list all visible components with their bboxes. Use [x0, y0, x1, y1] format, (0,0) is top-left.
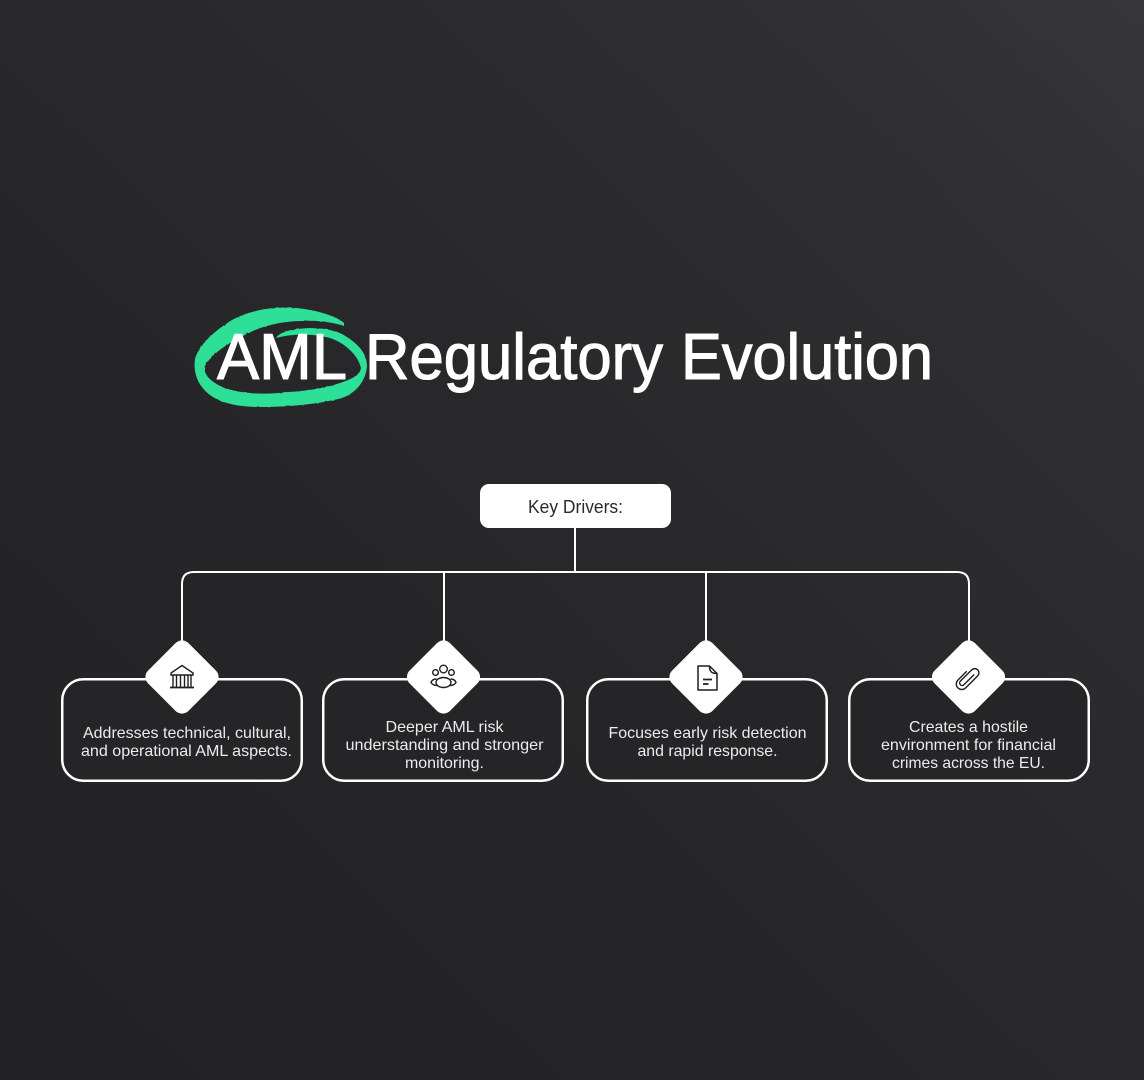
card 1 text: and operational AML aspects.	[81, 743, 292, 760]
card 3 text: and rapid response.	[638, 743, 778, 760]
card 4 text: environment for financial	[881, 737, 1056, 754]
key drivers box: Key Drivers:	[528, 497, 623, 517]
icon: document in diamond	[666, 637, 746, 717]
icon: people group in diamond	[403, 637, 484, 717]
title: AML	[217, 320, 347, 393]
key drivers box	[480, 484, 671, 528]
icon: paperclip in diamond	[928, 637, 1009, 717]
card 1: technical, cultural, operational	[62, 679, 302, 781]
card 2: risk understanding	[323, 679, 563, 781]
card 1 text: Addresses technical, cultural,	[83, 725, 291, 742]
card 2 text: Deeper AML risk	[386, 719, 505, 736]
green brush circle around AML	[195, 308, 367, 407]
card 3: early risk detection	[587, 679, 827, 781]
title	[217, 320, 933, 393]
title: Evolution	[681, 320, 933, 393]
card 2 text: monitoring.	[405, 755, 484, 772]
card 2 text: understanding and stronger	[346, 737, 544, 754]
title: Regulatory	[365, 320, 663, 393]
card 3 text: Focuses early risk detection	[608, 725, 806, 742]
icon: bank in diamond	[142, 637, 222, 717]
connector lines	[182, 528, 969, 645]
card 4: hostile environment	[849, 679, 1089, 781]
card 4 text: Creates a hostile	[909, 719, 1028, 736]
card 4 text: crimes across the EU.	[892, 755, 1045, 772]
